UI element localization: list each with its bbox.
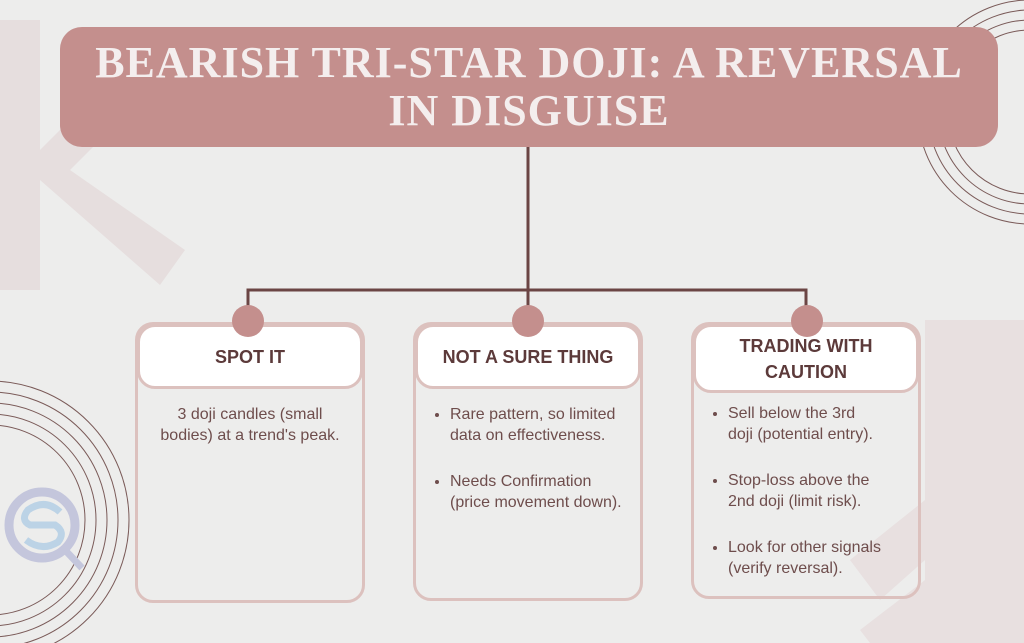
text: not a sure thing [435,406,622,511]
panel: trading with caution [691,322,921,599]
title [60,27,998,147]
text: not a sure thing: data on effectiveness. [450,427,605,444]
text: spot it: 3 doji candles (small [178,406,322,423]
text: trading with caution [713,405,881,577]
text: not a sure thing: Needs Confirmation [450,473,591,490]
heading: not a sure thing [415,324,641,389]
heading: trading with caution: TRADING WITH [740,336,872,356]
heading: spot it [137,324,363,389]
text: spot it [160,406,340,444]
heading: not a sure thing: NOT A SURE THING [443,346,613,366]
text: trading with caution: Look for other signals [728,539,881,556]
text: trading with caution: 2nd doji (limit risk). [728,493,861,510]
title: IN DISGUISE [388,86,670,135]
text: trading with caution: doji (potential entry). [728,426,873,443]
text: trading with caution: Sell below the 3rd [728,405,855,422]
panel: not a sure thing [413,322,643,601]
text: trading with caution: Stop-loss above the [728,472,869,489]
heading: trading with caution: CAUTION [765,362,847,382]
icon: logo [4,488,84,570]
panel: spot it [135,322,365,603]
text: not a sure thing: (price movement down). [450,494,622,511]
title: BEARISH TRI-STAR DOJI: A REVERSAL [95,38,963,87]
heading: spot it: SPOT IT [215,346,285,366]
connector dots [232,305,823,337]
text: trading with caution: (verify reversal). [728,560,843,577]
heading: trading with caution [693,324,919,393]
text: not a sure thing: Rare pattern, so limited [450,406,615,423]
text: spot it: bodies) at a trend's peak. [160,427,340,444]
